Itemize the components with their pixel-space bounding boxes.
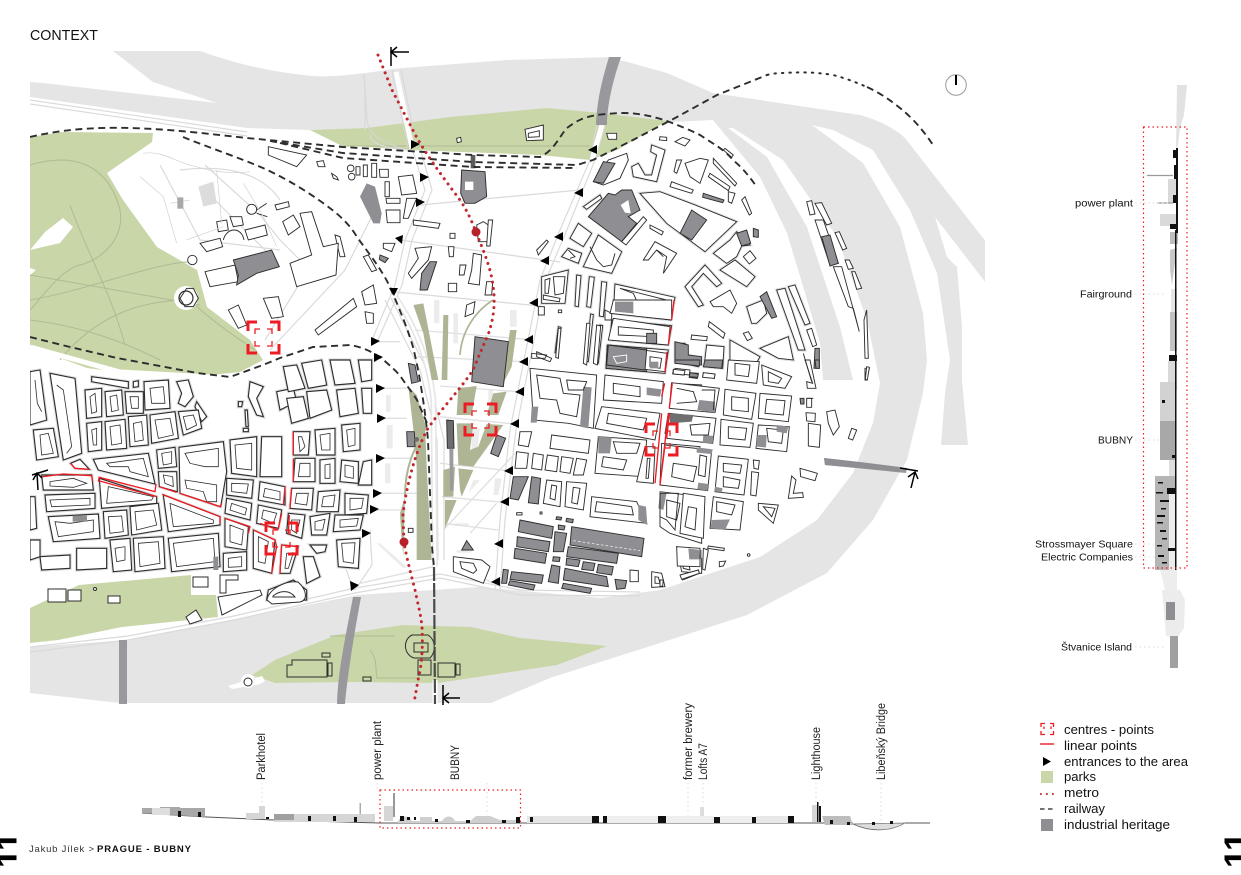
section labels: BUBNY xyxy=(1098,436,1133,446)
legend labels xyxy=(1064,722,1189,832)
marker: Vitezne xyxy=(266,523,297,554)
vertical labels: Parkhotel xyxy=(256,733,268,780)
legend icon: metro xyxy=(1040,793,1055,795)
legend icon: railway xyxy=(1040,808,1054,810)
factory complex xyxy=(502,517,644,593)
section arrow east xyxy=(900,468,918,488)
legend icon: centres xyxy=(1041,724,1054,734)
section labels: Fairground xyxy=(1080,290,1132,300)
right section drawing xyxy=(1035,85,1187,668)
bridge: Hlavka south xyxy=(337,597,361,704)
bridge: Libensky xyxy=(824,458,907,473)
west courtyards xyxy=(35,380,363,568)
title: CONTEXT xyxy=(30,27,98,44)
fairground rotunda xyxy=(174,286,198,310)
park: south-west xyxy=(30,575,218,643)
legend labels: parks xyxy=(1064,769,1096,784)
legend xyxy=(1040,722,1189,832)
section black parts xyxy=(1156,148,1178,570)
leader lines xyxy=(262,783,881,822)
vertical labels: power plant xyxy=(372,720,384,780)
roads xyxy=(30,85,640,652)
red linear points east xyxy=(655,300,674,485)
skyline light buildings xyxy=(142,793,905,830)
centre markers xyxy=(248,322,677,554)
marker: Strossmayer xyxy=(646,424,677,455)
park details xyxy=(30,146,590,680)
island buildings xyxy=(179,291,460,689)
ground line xyxy=(142,813,930,823)
section labels xyxy=(1035,198,1133,654)
vertical labels: Libeňský Bridge xyxy=(876,703,888,780)
river water xyxy=(30,51,987,703)
legend labels: linear points xyxy=(1064,738,1138,753)
bridge: Stefanik xyxy=(119,640,127,704)
section labels: Štvanice Island xyxy=(1061,640,1132,654)
railway corridor xyxy=(395,297,435,567)
skyline black parts xyxy=(178,802,893,825)
chimney lines xyxy=(1147,176,1173,203)
red linear points and bridge xyxy=(660,383,672,485)
context map xyxy=(30,51,987,704)
legend icon: parks xyxy=(1041,771,1053,783)
metro line xyxy=(378,55,494,703)
legend icon: entrance xyxy=(1043,757,1051,766)
bottom section drawing xyxy=(142,703,930,830)
park: north bank xyxy=(310,108,667,160)
vertical labels xyxy=(256,703,888,780)
parks xyxy=(30,108,667,683)
central east buildings xyxy=(407,300,702,593)
legend icon: industrial heritage xyxy=(1041,819,1053,831)
industrial hall at centre xyxy=(472,337,508,387)
Libensky bridge detail xyxy=(824,458,900,472)
Bubny area: roads and green strips (zoom coordinates) xyxy=(360,297,527,583)
bridge: Hlavkuv xyxy=(596,57,621,125)
legend labels: centres - points xyxy=(1064,722,1155,737)
leader lines xyxy=(1135,203,1170,647)
entrances xyxy=(350,140,597,591)
legend labels: metro xyxy=(1064,785,1099,800)
site streets xyxy=(360,330,527,583)
section arrow south xyxy=(443,685,460,705)
legend labels: railway xyxy=(1064,801,1105,816)
railway bridge south xyxy=(432,680,438,704)
legend labels: industrial heritage xyxy=(1064,817,1170,832)
park: Letna west xyxy=(30,132,263,377)
author footer xyxy=(29,844,192,855)
section arrow west xyxy=(32,470,48,490)
vertical labels: Lofts A7 xyxy=(698,743,710,780)
author footer: Jakub Jílek > xyxy=(29,844,94,855)
building halos west xyxy=(30,360,372,600)
section frame xyxy=(380,790,520,828)
legend icon: linear points xyxy=(1040,743,1054,745)
red linear points west xyxy=(43,432,298,573)
section labels: Electric Companies xyxy=(1041,552,1133,564)
block interiors xyxy=(612,300,613,301)
railway xyxy=(30,75,767,567)
author footer: PRAGUE - BUBNY xyxy=(97,844,192,855)
section labels: Strossmayer Square xyxy=(1035,540,1133,550)
vertical labels: former brewery xyxy=(683,703,695,780)
vertical labels: Lighthouse xyxy=(811,727,823,780)
marker: fairground xyxy=(248,322,279,353)
east block details xyxy=(532,137,869,382)
north-west fairground buildings xyxy=(140,147,417,335)
marker: Bubny xyxy=(465,404,496,435)
lake xyxy=(30,218,73,250)
bridges white decks xyxy=(30,72,602,378)
industrial patches west xyxy=(73,516,218,570)
section frame xyxy=(1144,127,1187,568)
vertical labels: BUBNY xyxy=(450,745,462,780)
north sign xyxy=(946,75,966,95)
section arrow north xyxy=(391,47,409,66)
legend labels: entrances to the area xyxy=(1064,754,1189,769)
section labels: power plant xyxy=(1075,198,1133,210)
metro stations xyxy=(400,228,480,546)
building halos east xyxy=(542,145,810,380)
far east buildings xyxy=(660,360,869,587)
east city blocks xyxy=(532,137,869,382)
pale building shadows xyxy=(377,300,517,568)
park: Stvanice island xyxy=(252,625,607,683)
southern embankment buildings xyxy=(48,575,305,624)
west city blocks xyxy=(30,360,372,600)
river-side buildings xyxy=(807,201,815,215)
olive strips xyxy=(400,300,517,560)
section silhouette xyxy=(1155,85,1187,668)
central and north buildings xyxy=(408,125,617,317)
